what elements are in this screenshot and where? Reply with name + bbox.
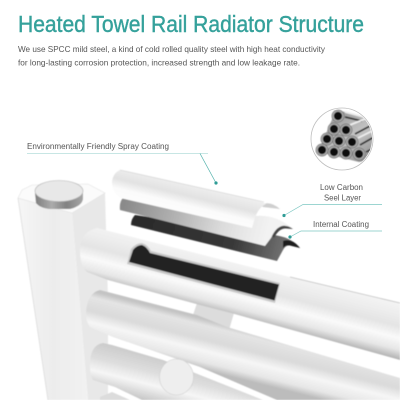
column top face xyxy=(18,184,105,213)
callout: low carbon steel layer xyxy=(282,183,382,217)
intro text xyxy=(18,44,326,68)
connector behind rails xyxy=(192,303,234,330)
column side face xyxy=(72,193,108,400)
rail 2 xyxy=(86,290,400,400)
rail 1 top edge xyxy=(290,277,400,303)
towel knob xyxy=(160,359,194,395)
internal coating layer xyxy=(131,215,300,261)
column front face xyxy=(18,198,88,400)
title: Heated Towel Rail Radiator Structure xyxy=(18,11,364,37)
callout: spray coating xyxy=(27,142,218,185)
rail 3 xyxy=(90,343,263,400)
spray coating outer shell xyxy=(112,170,280,228)
chrome cap xyxy=(35,180,83,209)
low carbon steel layer xyxy=(120,197,293,246)
callout: low carbon steel layer: Low Carbon xyxy=(320,183,363,192)
callout: internal coating: Internal Coating xyxy=(313,220,369,229)
inner window of rail 1 xyxy=(127,243,280,303)
intro text: for long-lasting corrosion protection, increased strength and low leakage rate. xyxy=(18,58,300,68)
intro text: We use SPCC mild steel, a kind of cold rolled quality steel with high heat conductivity xyxy=(18,44,326,54)
rail 1 xyxy=(80,228,400,360)
pipe bundle inset xyxy=(311,108,374,170)
radiator illustration xyxy=(18,170,400,400)
callout: spray coating: Environmentally Friendly Spray Coating xyxy=(27,142,169,151)
callout: low carbon steel layer: Seel Layer xyxy=(324,194,361,202)
callout: internal coating xyxy=(288,220,382,239)
column left edge xyxy=(18,198,48,400)
rail 4 xyxy=(100,392,130,400)
